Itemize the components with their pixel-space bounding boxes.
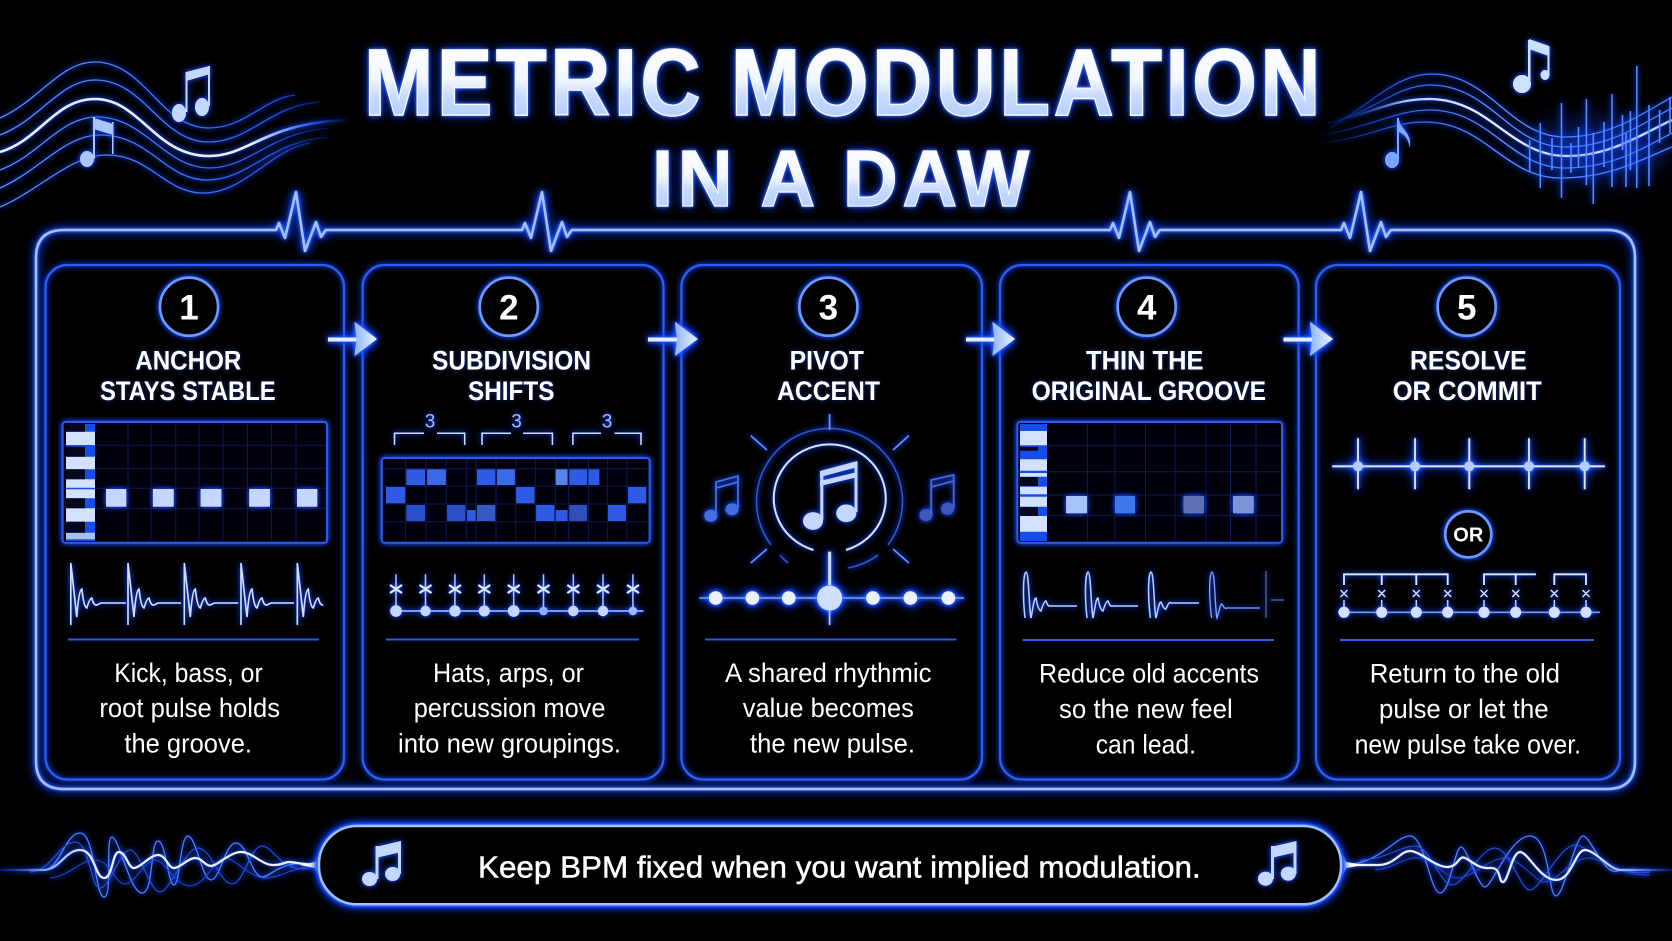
icon: top-left double note bbox=[172, 66, 210, 122]
description 1 bbox=[99, 658, 280, 758]
divider bbox=[705, 638, 956, 640]
divider bbox=[1023, 639, 1274, 641]
description 4: so the new feel bbox=[1059, 694, 1233, 724]
step number 5 bbox=[1438, 278, 1496, 336]
triplet brackets bbox=[394, 412, 641, 445]
heading 2: SUBDIVISION bbox=[432, 346, 591, 376]
hit timeline bbox=[390, 574, 644, 617]
heading 3: ACCENT bbox=[777, 376, 880, 406]
panel 2: subdivision shifts bbox=[363, 265, 664, 780]
or badge: OR bbox=[1453, 524, 1484, 546]
step number 3 bbox=[799, 278, 857, 336]
regrouped pulse line bbox=[1338, 574, 1600, 618]
description 1: root pulse holds bbox=[99, 693, 280, 723]
arrow 2 bbox=[648, 322, 698, 356]
description 5: Return to the old bbox=[1370, 658, 1560, 688]
panel 5: resolve or commit bbox=[1316, 265, 1620, 780]
decoration: top-left staff waves bbox=[0, 62, 350, 207]
decoration: top-right equalizer bars bbox=[1530, 66, 1670, 204]
piano roll 4 bbox=[1017, 422, 1282, 543]
accent dial with note bbox=[751, 414, 909, 568]
icon: top-right double note bbox=[1513, 39, 1550, 93]
panel 3: pivot accent bbox=[681, 265, 982, 780]
icon: banner left note bbox=[362, 841, 401, 886]
description 5: pulse or let the bbox=[1379, 694, 1549, 724]
step number 3: 3 bbox=[819, 288, 838, 328]
divider bbox=[1340, 639, 1594, 641]
bottom-left waveform bbox=[0, 833, 340, 897]
heading 5: RESOLVE bbox=[1410, 346, 1527, 376]
description 3: the new pulse. bbox=[750, 728, 915, 758]
heading 1: STAYS STABLE bbox=[100, 376, 276, 406]
step grid bbox=[382, 458, 650, 543]
heading 4: THIN THE bbox=[1086, 346, 1204, 376]
description 3: A shared rhythmic bbox=[725, 658, 932, 688]
description 1: the groove. bbox=[124, 728, 252, 758]
step number 2: 2 bbox=[499, 288, 519, 328]
title: METRIC MODULATION bbox=[364, 30, 1324, 136]
description 4: can lead. bbox=[1096, 730, 1196, 760]
heading 1: ANCHOR bbox=[135, 346, 241, 376]
description 4: Reduce old accents bbox=[1039, 658, 1259, 688]
decoration: top-right staff waves bbox=[1320, 74, 1672, 178]
icon: top-right single note bbox=[1385, 118, 1410, 168]
description 5 bbox=[1355, 658, 1581, 760]
step number 1 bbox=[160, 278, 218, 336]
divider bbox=[68, 638, 319, 640]
outer frame with ECG pulses bbox=[36, 192, 1635, 789]
step number 4: 4 bbox=[1137, 288, 1157, 328]
step number 1: 1 bbox=[179, 288, 199, 328]
piano roll 1 bbox=[63, 422, 327, 543]
description 3: value becomes bbox=[743, 693, 914, 723]
heading 3 bbox=[777, 346, 880, 406]
heading 4: ORIGINAL GROOVE bbox=[1032, 376, 1266, 406]
banner message: Keep BPM fixed when you want implied modulation. bbox=[478, 850, 1201, 885]
waveform 4 bbox=[1023, 571, 1284, 618]
icon: banner right note bbox=[1258, 841, 1296, 886]
triplet brackets: 3 bbox=[425, 412, 435, 432]
bottom-right waveform bbox=[1322, 836, 1672, 896]
description 3 bbox=[725, 658, 932, 758]
icon: top-left flagged note bbox=[80, 117, 114, 167]
description 2: into new groupings. bbox=[398, 728, 621, 758]
arrow 4 bbox=[1284, 322, 1333, 356]
waveform 1 bbox=[71, 563, 323, 625]
description 1: Kick, bass, or bbox=[114, 658, 263, 688]
heading 5: OR COMMIT bbox=[1393, 376, 1542, 406]
or badge bbox=[1445, 511, 1491, 557]
heading 3: PIVOT bbox=[790, 346, 864, 376]
title bbox=[364, 30, 1324, 223]
step number 5: 5 bbox=[1457, 288, 1476, 328]
pivot timeline bbox=[699, 552, 964, 625]
step number 4 bbox=[1118, 278, 1176, 336]
heading 1 bbox=[100, 346, 276, 406]
step number 2 bbox=[480, 278, 538, 336]
description 2: Hats, arps, or bbox=[433, 658, 584, 688]
icon: left side note bbox=[704, 476, 738, 522]
heading 5 bbox=[1393, 346, 1542, 406]
heading 2: SHIFTS bbox=[468, 376, 554, 406]
heading 4 bbox=[1032, 346, 1266, 406]
description 2 bbox=[398, 658, 621, 758]
description 5: new pulse take over. bbox=[1355, 730, 1581, 760]
title: IN A DAW bbox=[652, 134, 1034, 223]
divider bbox=[386, 638, 639, 640]
heading 2 bbox=[432, 346, 591, 406]
bottom banner bbox=[319, 826, 1341, 904]
panel 1: anchor stays stable bbox=[46, 265, 344, 780]
description 2: percussion move bbox=[414, 693, 606, 723]
panel 4: thin the original groove bbox=[1000, 265, 1299, 780]
steady pulse line bbox=[1332, 438, 1605, 489]
arrow 1 bbox=[328, 322, 377, 356]
icon: right side note bbox=[920, 475, 954, 521]
arrow 3 bbox=[966, 322, 1015, 356]
triplet brackets: 3 bbox=[511, 412, 522, 432]
triplet brackets: 3 bbox=[602, 412, 612, 432]
description 4 bbox=[1039, 658, 1259, 760]
